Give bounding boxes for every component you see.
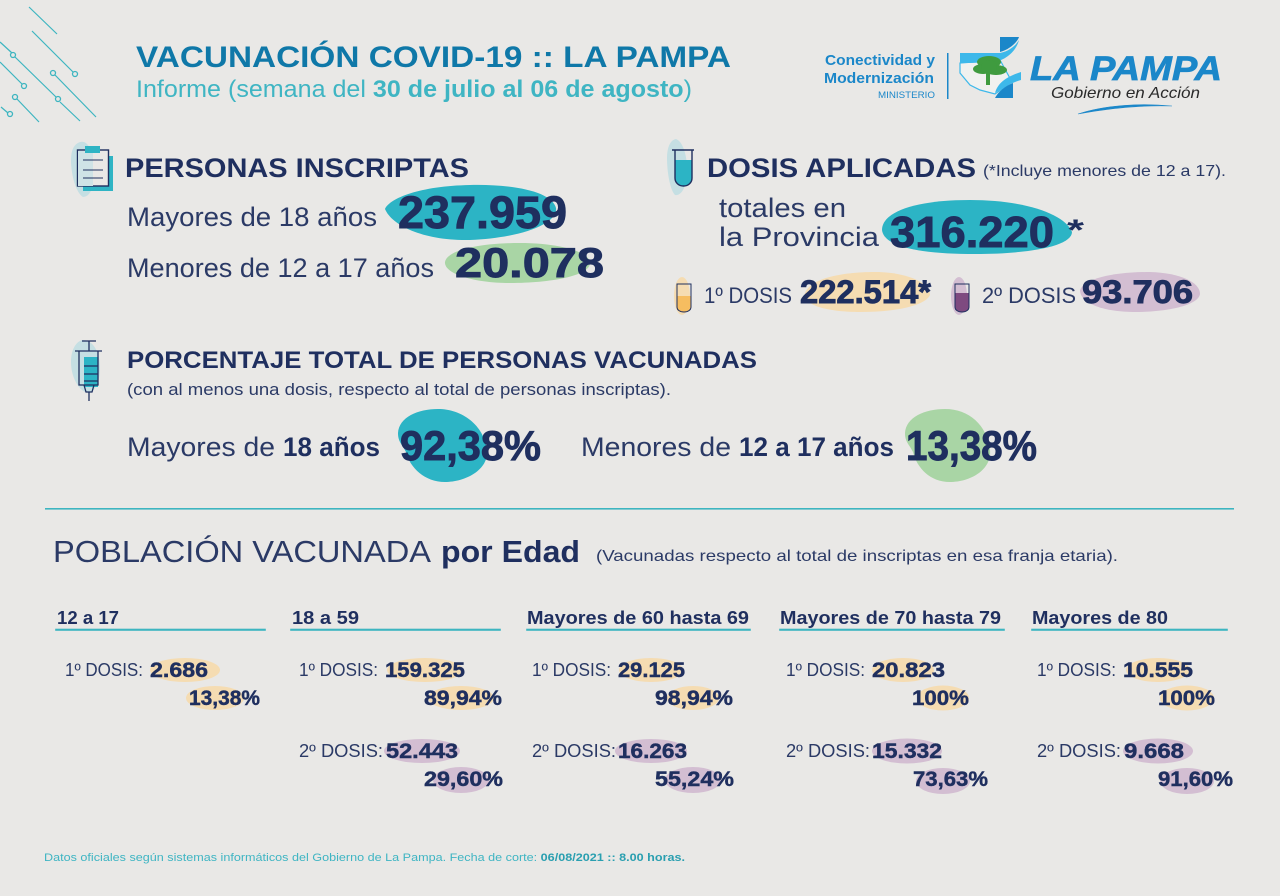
stat: mayores: Mayores de bbox=[127, 432, 275, 462]
column: 18 a 59: 89,94% bbox=[424, 687, 502, 710]
stat: total: la Provincia bbox=[719, 222, 880, 252]
stat: primera dosis bbox=[674, 272, 932, 315]
column: 70 a 79: 100% bbox=[912, 687, 969, 710]
stat: mayores: 92,38% bbox=[400, 422, 541, 469]
column: 60 a 69: 16.263 bbox=[618, 740, 687, 763]
section heading: población vacunada bbox=[53, 534, 1118, 569]
column: 60 a 69: Mayores de 60 hasta 69 bbox=[527, 608, 749, 628]
stat: mayores de 18: Mayores de 18 años bbox=[127, 202, 377, 232]
column: mayores de 80: 91,60% bbox=[1158, 768, 1233, 791]
column: 18 a 59: 18 a 59 bbox=[292, 608, 359, 628]
stat: segunda dosis bbox=[951, 272, 1200, 315]
column: 70 a 79: 20.823 bbox=[872, 659, 945, 682]
decorative circuit lines bbox=[0, 7, 96, 122]
logo: ministry and La Pampa government bbox=[824, 37, 1222, 114]
section heading: población vacunada: por Edad bbox=[441, 534, 580, 569]
column: 18 a 59: 1º DOSIS: bbox=[299, 660, 378, 680]
column: 70 a 79: 2º DOSIS: bbox=[786, 741, 870, 761]
stat: menores bbox=[581, 409, 1037, 482]
column: 18 a 59 bbox=[291, 608, 503, 793]
stat: menores: 12 a 17 años bbox=[739, 432, 894, 462]
column: 12 a 17: 1º DOSIS: bbox=[65, 660, 143, 680]
column: 70 a 79: 1º DOSIS: bbox=[786, 660, 865, 680]
stat: total: totales en bbox=[719, 193, 846, 223]
column: 70 a 79: 73,63% bbox=[913, 768, 988, 791]
stat: total: 316.220 bbox=[890, 208, 1054, 257]
logo: ministry and La Pampa government: MINISTERIO bbox=[878, 90, 935, 101]
panel: dosis aplicadas bbox=[667, 139, 1226, 315]
column: 18 a 59: 159.325 bbox=[385, 659, 465, 682]
column: 60 a 69: 55,24% bbox=[655, 768, 734, 791]
stat: mayores de 18: 237.959 bbox=[398, 187, 567, 238]
column: mayores de 80: 10.555 bbox=[1123, 659, 1193, 682]
column: 12 a 17 bbox=[56, 608, 265, 710]
stat: mayores: 18 años bbox=[283, 432, 380, 462]
column: mayores de 80: 100% bbox=[1158, 687, 1215, 710]
column: 60 a 69: 29.125 bbox=[618, 659, 685, 682]
column: 18 a 59: 29,60% bbox=[424, 768, 503, 791]
heading: DOSIS APLICADAS bbox=[707, 153, 976, 183]
stat: primera dosis: 1º DOSIS bbox=[704, 283, 792, 308]
stat: menores: Menores de bbox=[581, 432, 731, 462]
stat: segunda dosis: 2º DOSIS bbox=[982, 283, 1076, 308]
panel: personas inscriptas bbox=[71, 142, 604, 286]
icon: syringe bbox=[71, 340, 102, 401]
note: (*Incluye menores de 12 a 17). bbox=[983, 163, 1226, 180]
logo: ministry and La Pampa government: Conectividad y bbox=[825, 52, 936, 69]
stat: mayores bbox=[127, 409, 541, 482]
column: 12 a 17: 2.686 bbox=[150, 659, 208, 682]
column: mayores de 80: 2º DOSIS: bbox=[1037, 741, 1121, 761]
stat: menores: 20.078 bbox=[455, 239, 604, 286]
column: 70 a 79: Mayores de 70 hasta 79 bbox=[780, 608, 1001, 628]
column: 12 a 17: 13,38% bbox=[189, 687, 260, 710]
logo: ministry and La Pampa government: Gobierno en Acción bbox=[1051, 85, 1200, 102]
column: mayores de 80: Mayores de 80 bbox=[1032, 608, 1168, 628]
footer source note: Datos oficiales según sistemas informáticos del Gobierno de La Pampa. Fecha de corte: 06/08/2021 :: 8.00 horas. bbox=[44, 852, 685, 864]
column: mayores de 80: 9.668 bbox=[1124, 740, 1184, 763]
column: 60 a 69: 1º DOSIS: bbox=[532, 660, 611, 680]
column: 70 a 79: 15.332 bbox=[872, 740, 942, 763]
logo: ministry and La Pampa government: LA PAMPA bbox=[1030, 50, 1222, 88]
subheading: (con al menos una dosis, respecto al total de personas inscriptas). bbox=[127, 380, 671, 399]
title: VACUNACIÓN COVID-19 :: LA PAMPA bbox=[136, 40, 731, 74]
column: mayores de 80 bbox=[1032, 608, 1233, 794]
subtitle: Informe (semana del 30 de julio al 06 de agosto ) bbox=[136, 76, 692, 103]
stat: primera dosis: 222.514* bbox=[800, 274, 932, 310]
column: 18 a 59: 52.443 bbox=[386, 740, 458, 763]
icon: clipboard bbox=[71, 142, 113, 197]
section heading: población vacunada: (Vacunadas respecto al total de inscriptas en esa franja etaria). bbox=[596, 548, 1118, 565]
column: 70 a 79 bbox=[780, 608, 1004, 794]
heading: PORCENTAJE TOTAL DE PERSONAS VACUNADAS bbox=[127, 347, 757, 374]
icon: test tube bbox=[667, 139, 694, 195]
stat: menores bbox=[127, 239, 604, 286]
logo: ministry and La Pampa government: Modernización bbox=[824, 70, 934, 87]
column: 60 a 69: 98,94% bbox=[655, 687, 733, 710]
column: 60 a 69: 2º DOSIS: bbox=[532, 741, 616, 761]
column: mayores de 80: 1º DOSIS: bbox=[1037, 660, 1116, 680]
stat: total bbox=[719, 193, 1084, 257]
stat: total: * bbox=[1067, 214, 1084, 247]
column: 12 a 17: 12 a 17 bbox=[57, 608, 119, 628]
section heading: población vacunada: POBLACIÓN VACUNADA bbox=[53, 534, 431, 569]
column: 18 a 59: 2º DOSIS: bbox=[299, 741, 383, 761]
stat: mayores de 18 bbox=[127, 185, 567, 240]
panel: porcentaje total bbox=[71, 340, 1037, 482]
column: 60 a 69 bbox=[527, 608, 750, 793]
stat: segunda dosis: 93.706 bbox=[1082, 274, 1193, 310]
heading: PERSONAS INSCRIPTAS bbox=[125, 153, 469, 183]
stat: menores: 13,38% bbox=[906, 422, 1037, 469]
stat: menores: Menores de 12 a 17 años bbox=[127, 253, 434, 283]
